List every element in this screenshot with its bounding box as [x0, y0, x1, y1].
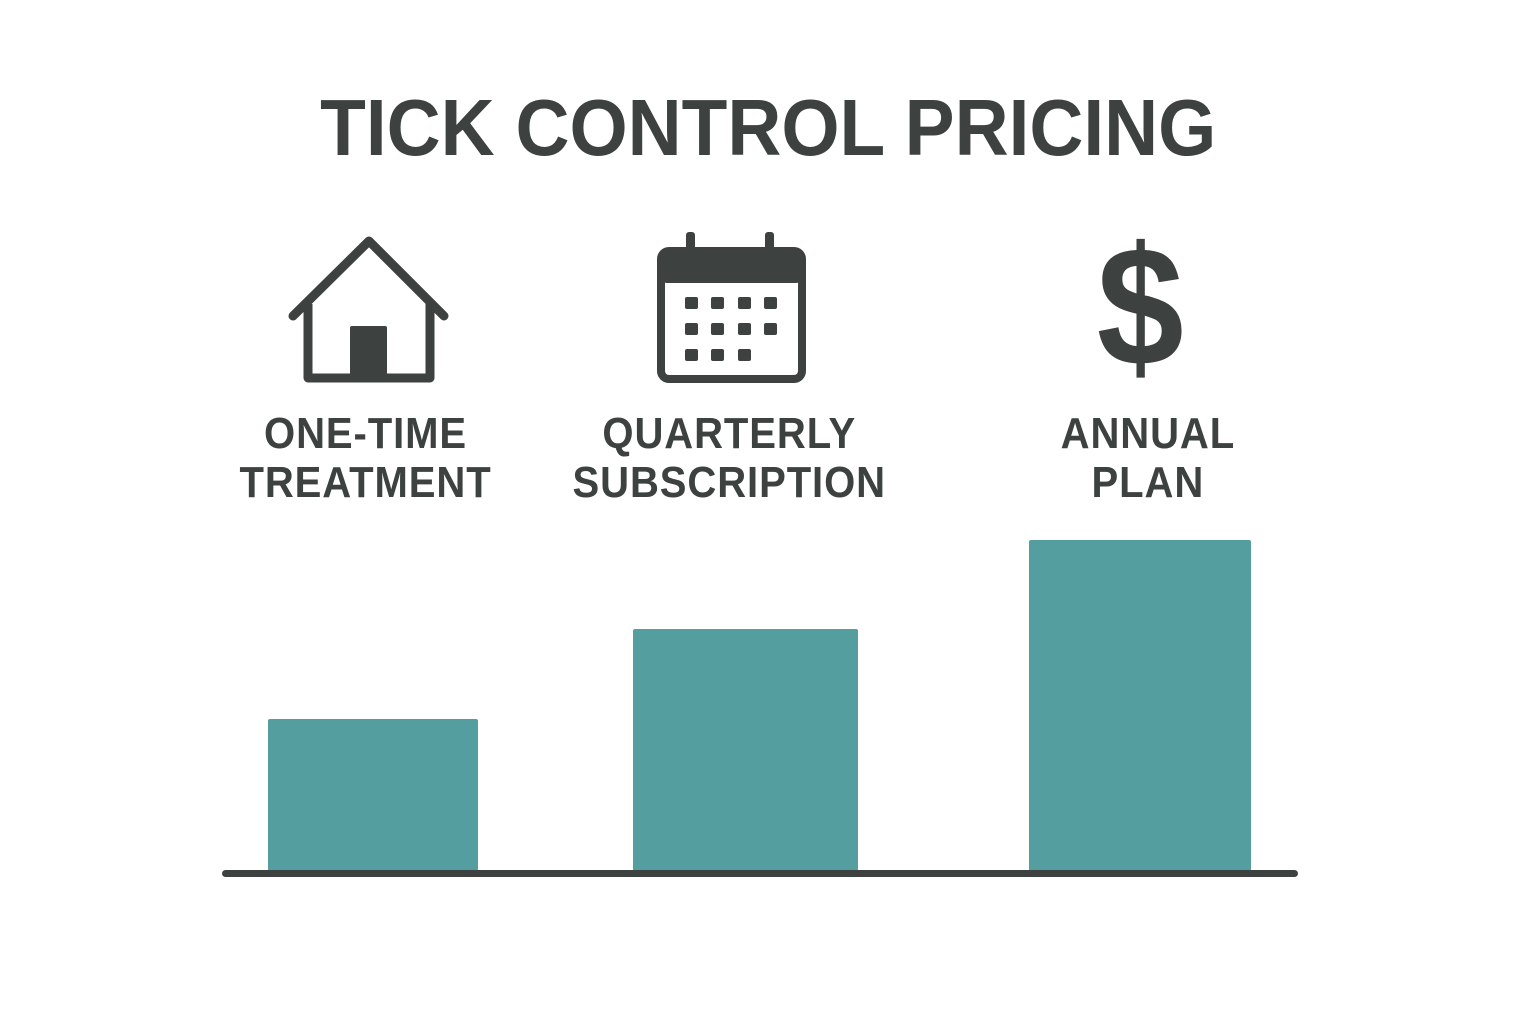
label: one-time treatment: TREATMENT — [240, 458, 492, 507]
label: annual plan: PLAN — [1092, 458, 1204, 507]
label: one-time treatment — [240, 409, 492, 507]
label: quarterly subscription: QUARTERLY — [602, 409, 856, 458]
icon: house — [288, 236, 448, 382]
bar: quarterly — [633, 629, 858, 871]
label: quarterly subscription: SUBSCRIPTION — [572, 458, 886, 507]
label: annual plan: ANNUAL — [1061, 409, 1235, 458]
icon: calendar — [657, 232, 806, 383]
axis baseline — [222, 870, 1298, 877]
bar chart — [222, 540, 1298, 877]
icon: dollar: $ — [1097, 212, 1183, 402]
title: TICK CONTROL PRICING — [320, 83, 1216, 172]
label: annual plan — [1061, 409, 1235, 507]
bar: one-time — [268, 719, 478, 871]
label: quarterly subscription — [572, 409, 886, 507]
bar: annual — [1029, 540, 1251, 871]
label: one-time treatment: ONE-TIME — [264, 409, 468, 458]
